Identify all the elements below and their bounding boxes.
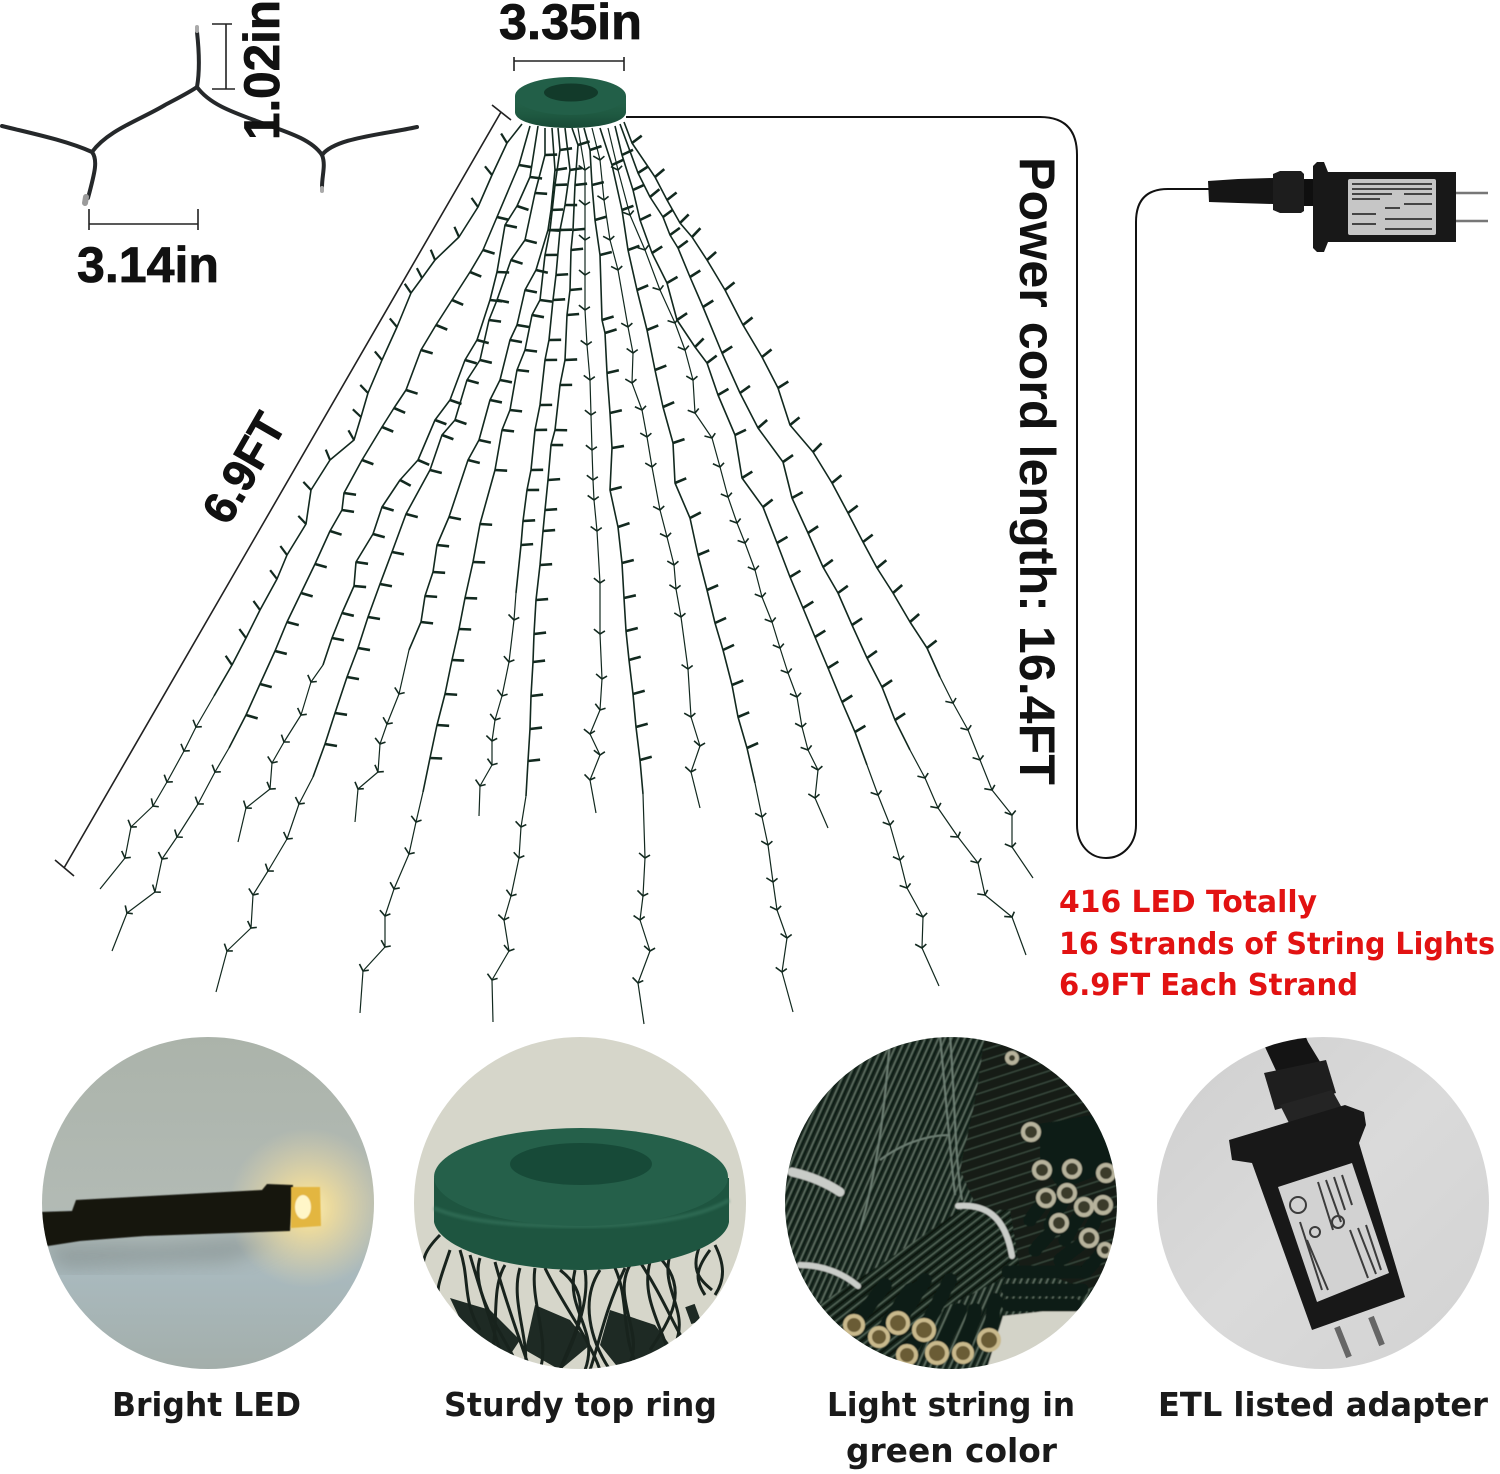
dimension label: 3.14in: 3.14in bbox=[77, 237, 219, 293]
ring hole bbox=[510, 1143, 652, 1185]
photo: green light string bbox=[780, 1035, 1122, 1375]
photo: sturdy top ring bbox=[410, 1035, 750, 1375]
LED wire bbox=[40, 1184, 293, 1246]
strand 13 bbox=[608, 128, 828, 828]
dimension label: 6.9FT: 6.9FT bbox=[192, 404, 296, 532]
strand 2 bbox=[112, 126, 530, 951]
bottom warm LED heads bbox=[845, 1313, 999, 1364]
photo: bright LED bbox=[40, 1035, 388, 1371]
ring top bbox=[434, 1128, 728, 1226]
dimension: 3.14in bracket bbox=[89, 209, 198, 230]
dimension: 3.35in bracket bbox=[514, 57, 624, 71]
spec: strand length: 6.9FT Each Strand bbox=[1059, 968, 1358, 1003]
strand 7 bbox=[479, 128, 570, 816]
lower bundle bbox=[819, 1209, 1019, 1360]
strand 9 bbox=[578, 128, 602, 813]
LED cluster bbox=[450, 1298, 701, 1370]
light strands bbox=[100, 122, 1033, 1024]
icon: wire segment with LED spacing bbox=[2, 27, 417, 203]
hanging wires bbox=[423, 1235, 722, 1370]
dimension: 6.9FT line bbox=[55, 105, 511, 876]
LED glow bbox=[240, 1137, 374, 1280]
strand 1 bbox=[100, 124, 522, 889]
photo: ETL listed adapter bbox=[1155, 1035, 1493, 1373]
ring side bbox=[434, 1178, 729, 1270]
red specification text bbox=[1059, 885, 1495, 1003]
strand 16 bbox=[624, 122, 1033, 878]
adapter prongs bbox=[1456, 193, 1488, 221]
silver clips bbox=[792, 1172, 1012, 1286]
LED heads bbox=[1007, 1053, 1114, 1256]
ring hole bbox=[544, 84, 598, 102]
prongs bbox=[1337, 1317, 1382, 1357]
ring top bbox=[515, 77, 626, 115]
caption: light string in green color: Light string in bbox=[827, 1385, 1075, 1424]
adapter cord bbox=[1265, 1038, 1320, 1070]
dimension: 1.02in bracket bbox=[212, 24, 235, 89]
vertical label: power cord length: Power cord length: 16.4FT bbox=[1009, 157, 1065, 785]
power adapter bbox=[1208, 162, 1488, 252]
strand 10 bbox=[584, 128, 650, 1024]
adapter label bbox=[1278, 1163, 1389, 1302]
caption: ETL listed adapter: ETL listed adapter bbox=[1158, 1385, 1489, 1424]
strand 15 bbox=[620, 124, 1026, 955]
adapter nut bbox=[1264, 1060, 1336, 1110]
ring highlight bbox=[434, 1200, 729, 1226]
strand 14 bbox=[615, 126, 939, 986]
cylinder LEDs bbox=[854, 1122, 1115, 1355]
dimension label: 1.02in: 1.02in bbox=[234, 0, 290, 140]
thin stray wires bbox=[860, 1035, 962, 1230]
top ring bbox=[515, 77, 626, 128]
threaded nut bbox=[1273, 171, 1304, 213]
adapter flange bbox=[1313, 162, 1456, 252]
adapter label bbox=[1348, 179, 1436, 235]
strand 4 bbox=[216, 128, 545, 992]
label print bbox=[1290, 1175, 1381, 1290]
caption: light string in green color: green color bbox=[846, 1431, 1058, 1470]
light background wedge bbox=[987, 1306, 1080, 1365]
caption: light string in green color bbox=[827, 1385, 1075, 1470]
strand 8 bbox=[492, 128, 578, 1022]
strand 3 bbox=[238, 126, 538, 842]
strand 5 bbox=[355, 128, 555, 822]
strand 6 bbox=[360, 128, 560, 1013]
wire shadow bbox=[43, 1235, 290, 1268]
caption: Sturdy top ring: Sturdy top ring bbox=[444, 1385, 717, 1424]
adapter neck bbox=[1282, 1094, 1341, 1122]
power cord bbox=[626, 117, 1210, 858]
strand 11 bbox=[592, 128, 700, 808]
spec: LED count: 416 LED Totally bbox=[1059, 885, 1317, 920]
caption: Bright LED: Bright LED bbox=[112, 1385, 301, 1424]
adapter body bbox=[1229, 1105, 1405, 1330]
plug connector bbox=[1208, 178, 1273, 204]
strand 12 bbox=[600, 128, 793, 1012]
dark upper right bbox=[960, 1035, 1122, 1300]
ring side bbox=[515, 96, 626, 128]
LED bulb bbox=[291, 1187, 321, 1228]
